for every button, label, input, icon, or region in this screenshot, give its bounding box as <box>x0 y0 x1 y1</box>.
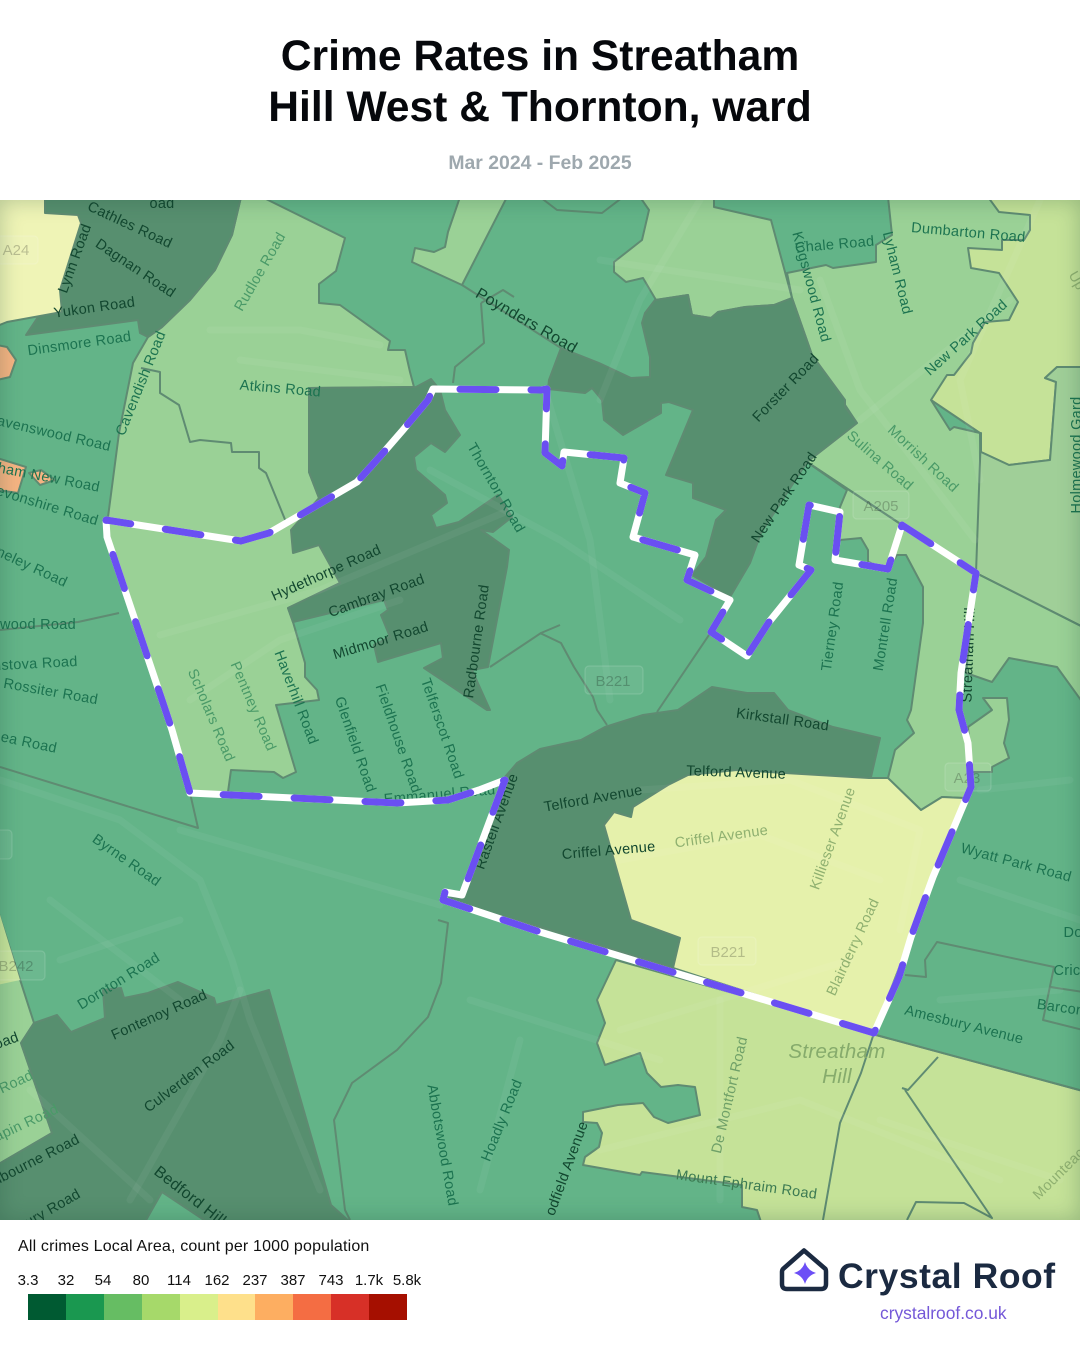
road labels: Cambray Road <box>326 571 427 621</box>
road labels: Dornton Road <box>75 950 163 1013</box>
road labels: Rastell Avenue <box>473 772 522 872</box>
road labels: Sulina Road <box>843 428 916 494</box>
legend scale labels: 162 <box>204 1272 230 1289</box>
road labels: Telford Avenue <box>686 763 786 783</box>
date range subtitle: Mar 2024 - Feb 2025 <box>448 152 632 174</box>
road labels: Forster Road <box>750 351 823 426</box>
choropleth areas <box>0 197 1080 1222</box>
road labels: Tierney Road <box>819 581 847 672</box>
road labels: Dagnan Road <box>92 236 178 301</box>
road labels: Emmanuel Road <box>383 782 496 808</box>
road labels: Hydethorpe Road <box>269 542 384 605</box>
road number badges: B221 <box>710 944 746 961</box>
road number badges: A24 <box>3 242 29 259</box>
road labels: Chale Road <box>794 234 875 256</box>
road labels: Scholars Road <box>184 667 237 764</box>
road labels: Yukon Road <box>53 294 136 322</box>
road labels: Morrish Road <box>884 422 961 496</box>
road number badges: B221 <box>595 673 631 690</box>
road labels: Cavendish Road <box>113 329 170 438</box>
road labels: Pentney Road <box>227 659 279 754</box>
road labels: Fieldhouse Road <box>372 682 424 795</box>
road labels: Criffel Avenue <box>674 823 769 851</box>
legend scale labels: 32 <box>58 1272 74 1289</box>
title: Hill West & Thornton, ward <box>268 83 812 131</box>
road labels: New Park Road <box>922 297 1011 379</box>
ward boundary <box>106 389 976 1033</box>
road labels: Telford Avenue <box>543 783 644 816</box>
legend scale labels: 3.3 <box>18 1272 38 1289</box>
title: Crime Rates in Streatham <box>281 32 799 80</box>
logo wordmark: Crystal Roof <box>838 1256 1056 1296</box>
road labels: Fontenoy Road <box>109 987 210 1044</box>
map edge vignette <box>0 200 1080 1220</box>
legend scale labels: 237 <box>242 1272 268 1289</box>
road labels: Streatham <box>788 1040 886 1063</box>
road labels: Byrne Road <box>89 831 163 890</box>
road labels: Kirkstall Road <box>735 706 830 734</box>
road labels: Lynn Road <box>55 222 95 295</box>
logo icon: house with star <box>780 1248 828 1292</box>
legend scale labels: 1.7k <box>355 1272 384 1289</box>
road labels: Blairderry Road <box>824 896 883 998</box>
road labels: Dumbarton Road <box>911 220 1026 246</box>
road number badges: A205 <box>863 498 899 515</box>
road labels: Streatham Hill <box>959 607 979 703</box>
legend scale labels: 387 <box>280 1272 306 1289</box>
road labels: Hill <box>822 1065 853 1088</box>
road number badges <box>0 236 991 980</box>
road labels: Cric <box>1054 963 1080 979</box>
map panel <box>0 200 1080 1220</box>
road labels: Culverden Road <box>141 1038 238 1116</box>
area boundary lines <box>0 197 1080 1220</box>
road labels: Poynders Road <box>473 285 580 357</box>
road labels: Rudloe Road <box>232 230 289 314</box>
road labels: Telferscot Road <box>417 676 466 781</box>
road labels: Glenfield Road <box>331 695 379 795</box>
road labels: Wyatt Park Road <box>959 841 1073 886</box>
road labels: Kingswood Road <box>788 230 833 344</box>
road labels: Amesbury Avenue <box>903 1003 1025 1048</box>
road labels: Radbourne Road <box>461 584 493 699</box>
legend scale labels <box>18 1272 422 1289</box>
road labels <box>0 196 1080 1231</box>
road labels: Mount Ephraim Road <box>675 1167 818 1203</box>
road labels: Criffel Avenue <box>561 839 656 863</box>
road labels: odfield Avenue <box>543 1119 592 1218</box>
legend scale labels: 80 <box>133 1272 149 1289</box>
website url: crystalroof.co.uk <box>880 1303 1007 1323</box>
road labels: Rossiter Road <box>2 676 99 708</box>
road number badges: A23 <box>954 770 980 787</box>
road labels: Atkins Road <box>239 377 322 401</box>
road labels: Dinsmore Road <box>27 329 132 359</box>
road labels: ea Road <box>0 729 58 757</box>
road labels: Cathles Road <box>85 200 175 252</box>
title <box>268 32 812 131</box>
road labels: Midmoor Road <box>331 619 430 663</box>
legend colour scale <box>28 1294 407 1320</box>
road labels: Montrell Road <box>871 577 901 672</box>
road labels: New Park Road <box>749 450 821 546</box>
road labels: wood Road <box>0 617 76 633</box>
legend scale labels: 114 <box>167 1272 191 1289</box>
legend title: All crimes Local Area, count per 1000 population <box>18 1238 369 1255</box>
road labels: Lyham Road <box>879 230 915 316</box>
road labels: De Montfort Road <box>709 1035 751 1155</box>
road labels: Abbotswood Road <box>423 1083 460 1207</box>
faint street network <box>0 200 1080 1200</box>
road labels: Killieser Avenue <box>807 785 859 892</box>
road labels: Thornton Road <box>463 440 528 536</box>
legend scale labels: 5.8k <box>393 1272 422 1289</box>
legend scale labels: 54 <box>95 1272 111 1289</box>
legend scale labels: 743 <box>318 1272 344 1289</box>
road labels: Hoadly Road <box>479 1077 526 1164</box>
road labels: Haverhill Road <box>270 648 321 747</box>
